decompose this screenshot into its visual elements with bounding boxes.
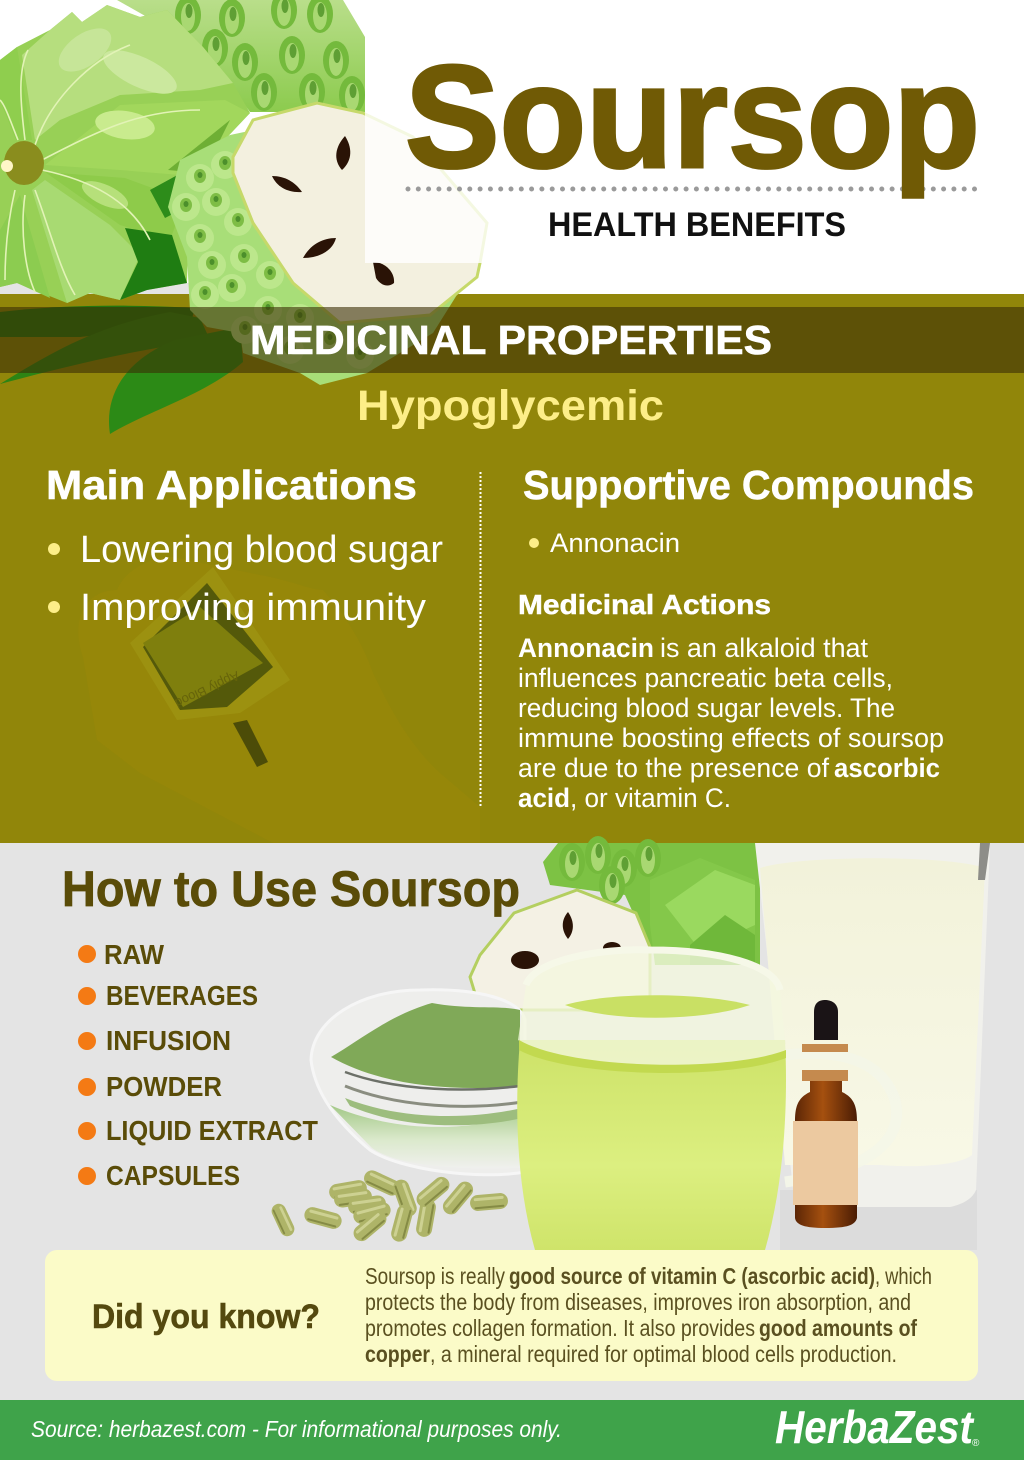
panel: medicinal properties background (0, 294, 1024, 843)
fruit ribs (0, 45, 200, 295)
paragraph: is an alkaloid that (660, 633, 868, 663)
paragraph: influences pancreatic beta cells, (518, 663, 893, 693)
callout text: , a mineral required for optimal blood cells production. (430, 1341, 897, 1367)
title: Soursop (405, 35, 980, 198)
paragraph: immune boosting effects of soursop (518, 723, 944, 753)
mug (517, 1040, 786, 1250)
list: uses (78, 939, 318, 1191)
panel: supportive compounds (518, 462, 974, 813)
callout text: good source of vitamin C (ascorbic acid) (509, 1263, 875, 1289)
rear fruit (117, 0, 365, 112)
callout heading: Did you know? (92, 1298, 320, 1336)
heading: medicinal properties: MEDICINAL PROPERTIES (250, 317, 772, 363)
bowl (311, 990, 525, 1175)
footer: ® (972, 1438, 980, 1449)
heading: how to use: How to Use Soursop (62, 861, 520, 917)
illustration: soursop fruits with slice and leaves (0, 0, 487, 434)
callout text (365, 1263, 932, 1367)
fruit lobes (0, 5, 250, 303)
paragraph: reducing blood sugar levels. The (518, 693, 895, 723)
powder (331, 1003, 520, 1088)
panel: main applications (46, 462, 443, 629)
front fruit (0, 5, 250, 303)
source note: Source: herbazest.com - For informational purposes only. (31, 1416, 562, 1442)
table shadow (0, 283, 195, 294)
paragraph: Annonacin (518, 633, 654, 663)
list: uses: CAPSULES (106, 1160, 240, 1191)
subtitle: HEALTH BENEFITS (548, 206, 846, 244)
dotted column divider (480, 472, 482, 808)
bullet list (48, 529, 443, 629)
callout text: good amounts of (759, 1315, 917, 1341)
callout text: Soursop is really (365, 1263, 505, 1289)
milk glass (755, 843, 990, 1207)
callout text: protects the body from diseases, improves iron absorption, and (365, 1289, 911, 1315)
background fruit (543, 843, 760, 965)
band: medicinal properties (0, 307, 1024, 373)
leaf: left (0, 312, 210, 384)
heading: Main Applications (46, 462, 417, 508)
paragraph: acid (518, 783, 570, 813)
heading: hypoglycemic: Hypoglycemic (357, 382, 664, 430)
panel: how to use background (0, 843, 1024, 1400)
footer (0, 1400, 1024, 1460)
list: uses: POWDER (106, 1071, 222, 1102)
fruit stem (4, 141, 44, 185)
callout text: promotes collagen formation. It also provides (365, 1315, 755, 1341)
compound list: Annonacin (550, 528, 680, 558)
bumpy slice body (168, 110, 477, 385)
list: uses: INFUSION (106, 1025, 231, 1056)
paragraph: , or vitamin C. (570, 783, 731, 813)
floor shadow (780, 1190, 977, 1250)
callout text: , which (875, 1263, 932, 1289)
paragraph: ascorbic (834, 753, 940, 783)
list: uses: LIQUID EXTRACT (106, 1115, 318, 1146)
illustration: hand holding glucose meter (78, 557, 480, 843)
slice (470, 890, 650, 1010)
list: uses: BEVERAGES (106, 980, 258, 1011)
leaf: top (0, 306, 195, 337)
dotted divider (408, 186, 980, 192)
illustration: preparations (269, 836, 990, 1250)
callout text: copper (365, 1341, 430, 1367)
heading: medicinal actions: Medicinal Actions (518, 589, 771, 620)
slice flesh (233, 103, 487, 323)
bullet list: Lowering blood sugar (80, 529, 443, 571)
paragraph (518, 633, 944, 813)
fade panel over fruit (365, 0, 491, 263)
heading: Supportive Compounds (523, 462, 974, 508)
callout: did you know (45, 1250, 978, 1381)
mug glass upper (518, 950, 786, 1068)
mug handle (785, 1053, 897, 1182)
bullet list: Improving immunity (80, 587, 426, 629)
capsules (269, 1168, 509, 1244)
logo: HerbaZest (775, 1401, 974, 1453)
list: uses: RAW (104, 939, 165, 970)
dropper bottle (793, 1000, 858, 1228)
leaf: lower (109, 327, 243, 434)
paragraph: are due to the presence of (518, 753, 829, 783)
seeds (272, 136, 394, 285)
illustration: hand holding glucose meter: Apply Blood (173, 668, 242, 711)
